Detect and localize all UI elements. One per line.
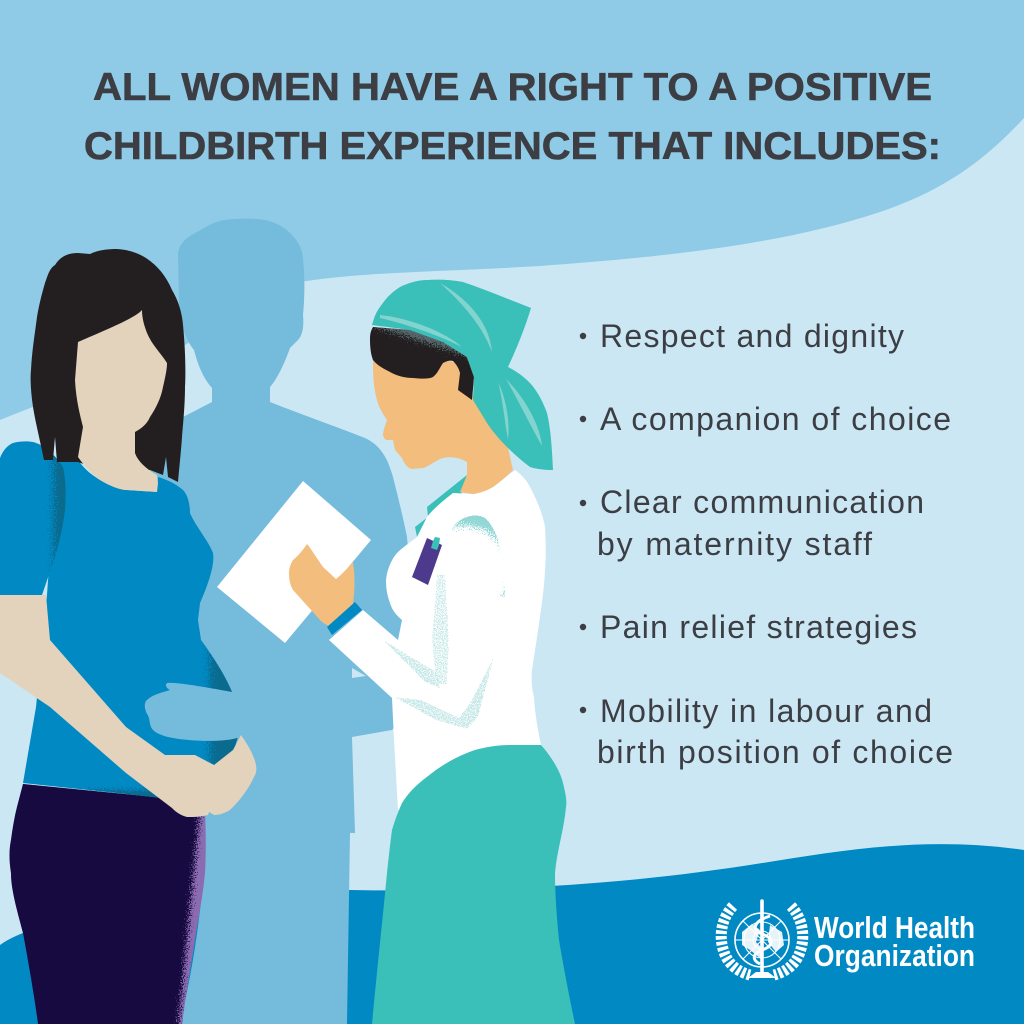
midwife: hair [370,327,474,400]
logo text: Organization [814,938,975,973]
woman: shirt sleeve [0,441,66,595]
woman: shirt torso [23,460,240,797]
companion hand on belly [145,683,262,741]
background: upper blue wave [0,0,1024,420]
title [84,66,941,168]
item: mobility [580,693,953,770]
item: communication [580,484,924,562]
icon: WHO emblem [721,901,803,978]
title: ALL WOMEN HAVE A RIGHT TO A POSITIVE [93,66,932,109]
item: pain relief: Pain relief strategies [600,609,917,645]
logo text [814,910,975,973]
midwife: sleeve shading [394,657,494,729]
midwife: pen clip [431,537,440,550]
background: lower dark blue wave [0,844,1024,1024]
midwife: coat crease shading [432,575,449,684]
woman: hair [31,249,185,482]
midwife: elbow shading [383,640,440,688]
midwife: headscarf [372,280,553,470]
midwife: small background gap [352,668,366,678]
woman: face and neck [75,310,167,492]
midwife: white coat [329,470,546,810]
woman: solid dark trousers [10,784,190,1024]
woman: arm and hand [0,595,256,817]
midwife: blue cuff [327,602,362,635]
title: CHILDBIRTH EXPERIENCE THAT INCLUDES: [84,125,941,168]
midwife: skirt [372,745,575,1024]
companion silhouette [150,219,420,1024]
woman: hem shading [85,784,159,798]
item: respect: Respect and dignity [600,318,904,354]
midwife: collar [415,475,467,537]
midwife: coat shoulder shading [451,515,505,597]
bullet list [580,318,953,770]
midwife: hand [289,544,354,627]
item: communication: Clear communication [600,484,924,520]
woman: belly shading [196,642,238,765]
midwife: scarf highlights [380,283,542,446]
item: companion: A companion of choice [600,401,951,437]
WHO logo [721,901,975,978]
logo text: World Health [814,910,975,945]
midwife: neck and face [373,340,513,494]
item: mobility: birth position of choice [597,734,953,770]
midwife [289,280,575,1024]
item: communication: by maternity staff [597,526,872,562]
woman: trouser shadow [170,816,205,1024]
midwife: badge [412,538,442,585]
pregnant woman [0,249,240,1024]
woman: sleeve shading [44,456,66,582]
clipboard [217,481,371,643]
item: mobility: Mobility in labour and [600,693,932,729]
woman: trousers [10,784,206,1024]
midwife: hair highlight [373,327,468,363]
